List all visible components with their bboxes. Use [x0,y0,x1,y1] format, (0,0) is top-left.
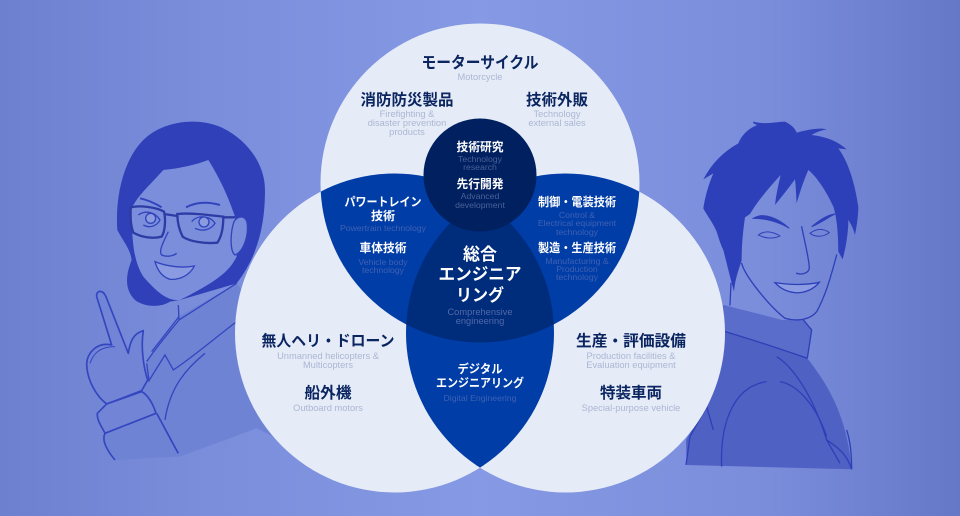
label: outboard motors [293,383,363,413]
label: advanced development: 先行開発 [456,176,504,191]
label: technology research [456,139,504,172]
man collar [723,305,812,358]
circle: top [320,24,640,342]
venn diagram [235,24,725,492]
label: firefighting products: 消防防災製品 [360,91,454,109]
label: comprehensive engineering: engineering [456,316,504,326]
label: firefighting products [360,91,454,137]
label: outboard motors: 船外機 [304,383,352,402]
woman eyes and brows [138,198,220,256]
circle: left [235,174,554,492]
label: advanced development [455,176,505,210]
label: digital engineering: Digital Engineering [444,393,517,403]
label: special-purpose vehicle [582,383,680,413]
label: vehicle body technology [358,240,408,275]
woman collar lines [147,283,237,420]
label: technology external sales: Technology [533,109,581,119]
label: powertrain technology [340,195,427,233]
woman hand and sleeve [87,291,178,460]
illustration: woman with glasses pointing [87,122,280,460]
woman glasses [130,206,235,243]
illustration: man with spiky hair [686,122,858,469]
label: production facilities: Evaluation equipment [586,360,676,370]
label: vehicle body technology: technology [362,265,405,275]
label: firefighting products: products [389,127,425,137]
label: control and electrical technology [538,194,617,237]
label: technology research: research [463,162,497,172]
label: powertrain technology: 技術 [371,208,395,223]
label: manufacturing technology: Production [556,264,598,274]
label: comprehensive engineering: エンジニア [438,265,522,284]
label: technology external sales [526,90,588,128]
label: comprehensive engineering: Comprehensive [447,307,513,317]
label: comprehensive engineering: 総合 [463,245,497,264]
label: manufacturing technology: technology [556,272,599,282]
label: unmanned helicopters: Unmanned helicopters & [277,351,380,361]
label: unmanned helicopters: 無人ヘリ・ドローン [262,332,394,350]
label: control and electrical technology: Electrical equipment [538,218,617,228]
label: comprehensive engineering: リング [456,285,504,305]
circle: right [406,174,725,492]
label: technology external sales: external sales [528,118,586,128]
label: powertrain technology: パワートレイン [344,195,422,209]
label: powertrain technology: Powertrain technology [340,223,427,233]
label: digital engineering: エンジニアリング [436,375,524,390]
woman ear [231,217,247,255]
label: vehicle body technology: Vehicle body [358,257,408,267]
label: control and electrical technology: Control & [559,210,595,220]
label: motorcycle [422,54,538,82]
label: advanced development: Advanced [461,191,499,201]
label: production facilities: 生産・評価設備 [576,332,686,350]
overlap: top and left [320,174,450,324]
overlap: top and right [406,174,640,324]
woman face [132,160,237,300]
label: digital engineering [436,361,524,403]
woman mouth [155,262,194,279]
label: control and electrical technology: technology [556,227,599,237]
label: digital engineering: デジタル [458,361,502,376]
label: unmanned helicopters [262,332,394,370]
label: technology research: Technology [458,154,503,164]
man jacket [686,305,852,469]
label: technology research: 技術研究 [456,139,504,154]
woman jacket [97,283,280,460]
man mouth [775,282,819,293]
label: manufacturing technology: Manufacturing & [545,256,609,266]
label: unmanned helicopters: Multicopters [303,360,353,370]
man hair [703,122,858,292]
label: comprehensive engineering [438,245,522,326]
label: special-purpose vehicle: Special-purpose vehicle [582,403,680,413]
label: special-purpose vehicle: 特装車両 [600,383,662,402]
label: production facilities: Production facilities & [587,351,676,361]
label: manufacturing technology: 製造・生産技術 [538,240,616,255]
label: manufacturing technology [538,240,616,282]
label: control and electrical technology: 制御・電装技術 [538,194,616,209]
overlap: left and right [406,324,554,468]
overlap: centre all three [406,223,554,342]
label: technology external sales: 技術外販 [526,90,588,109]
man eyebrows [753,214,835,228]
woman hair [117,122,265,306]
label: advanced development: development [455,200,505,210]
label: firefighting products: Firefighting & [380,109,435,119]
label: motorcycle: モーターサイクル [422,54,538,72]
label: outboard motors: Outboard motors [293,403,363,413]
core circle [424,118,536,232]
man jacket lines [686,320,852,469]
man face lines [730,227,837,320]
label: vehicle body technology: 車体技術 [360,240,406,255]
label: production facilities [576,332,686,370]
label: motorcycle: Motorcycle [458,72,502,82]
label: firefighting products: disaster prevention [368,118,446,128]
